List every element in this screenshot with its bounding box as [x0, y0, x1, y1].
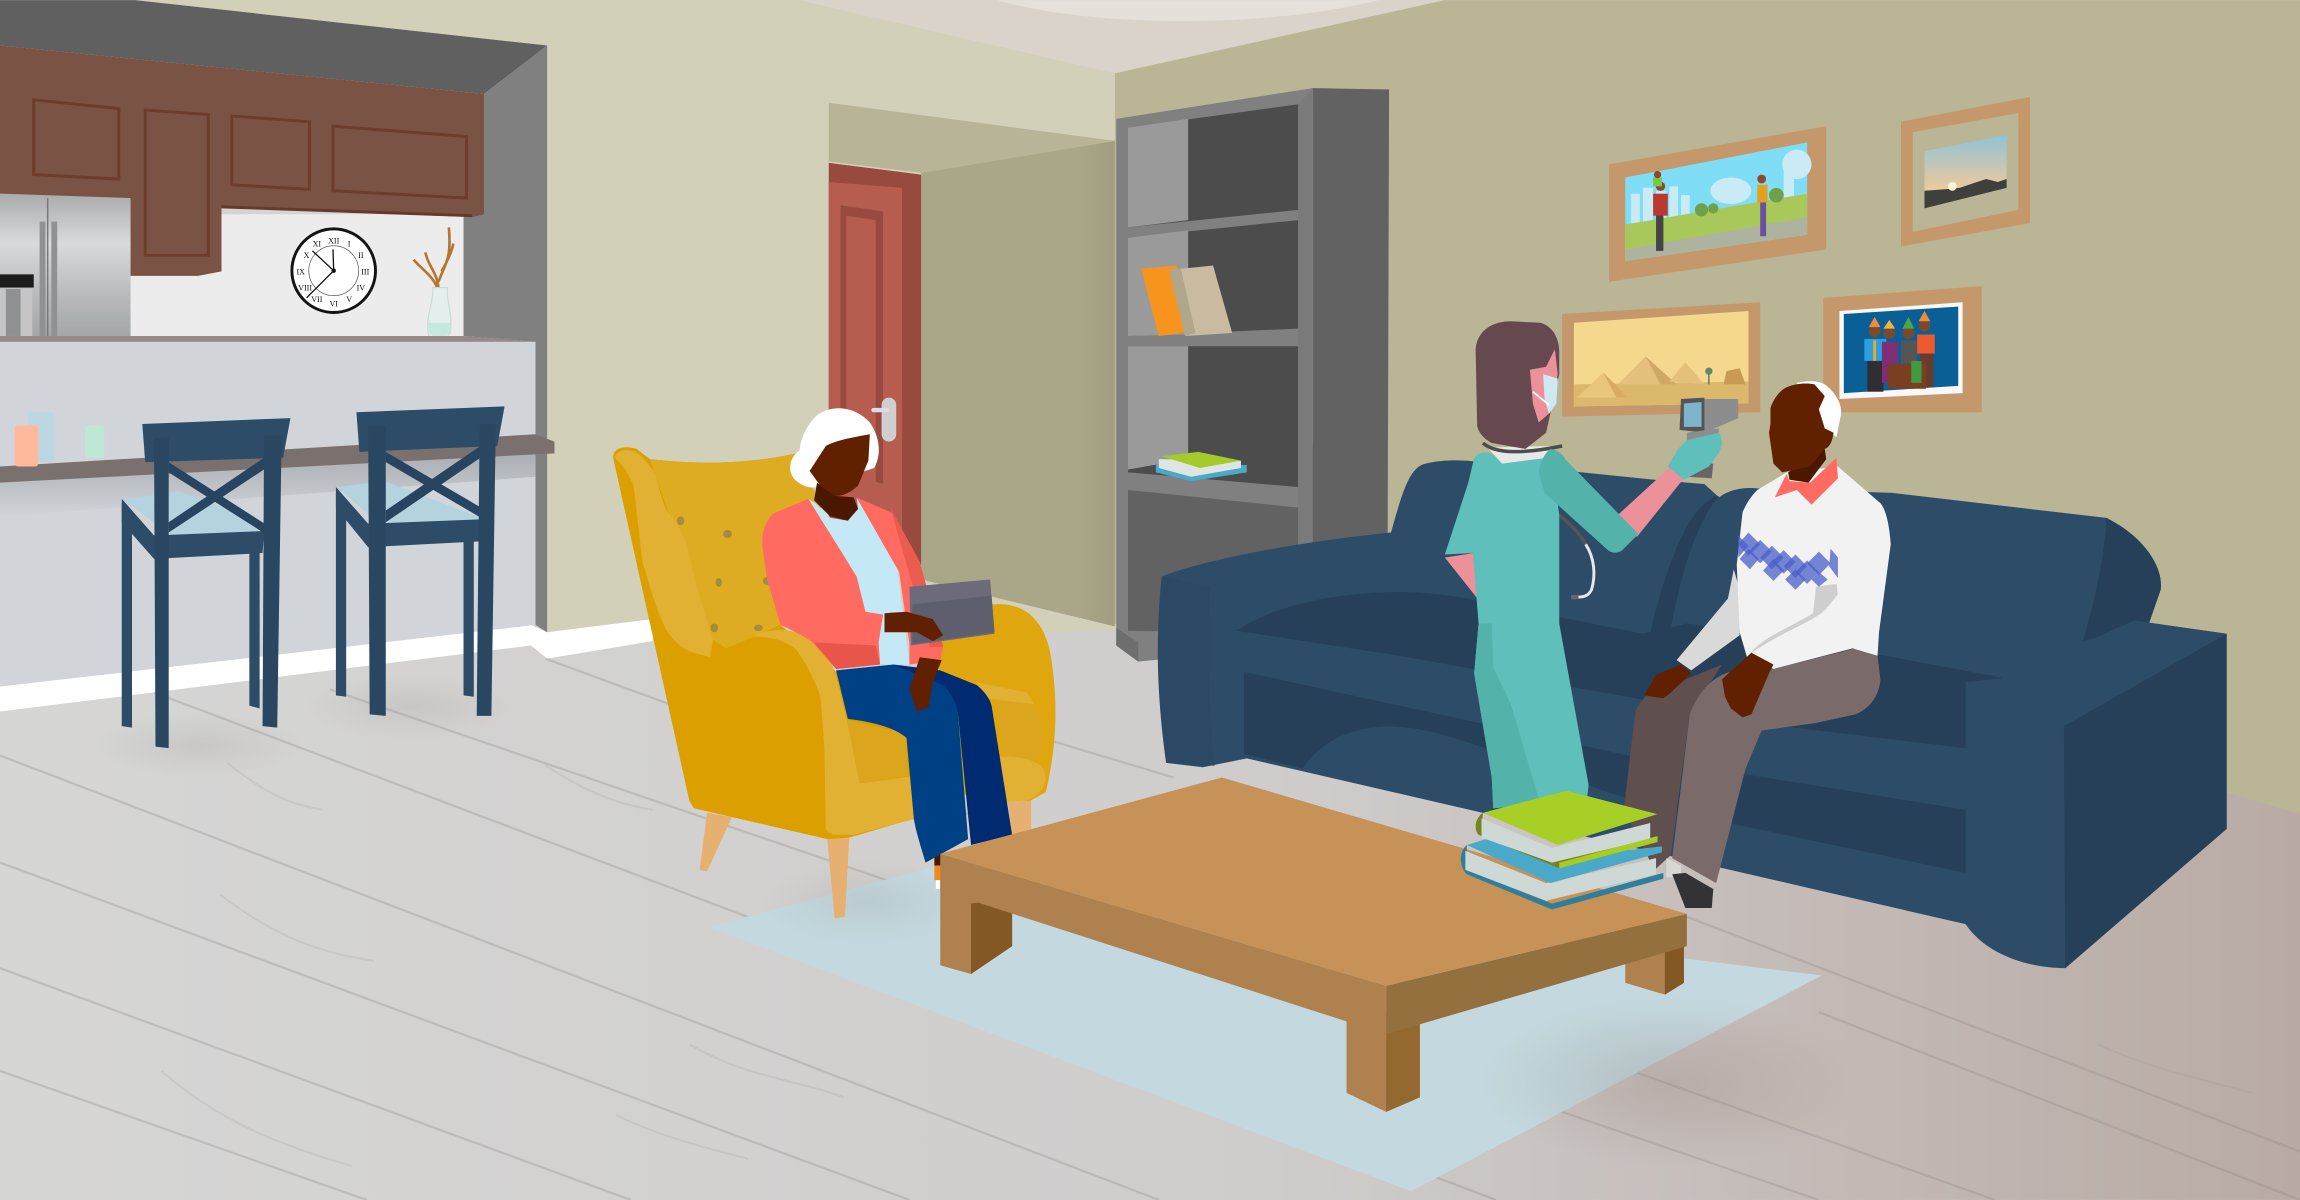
- kitchen side wall: [464, 46, 547, 632]
- man: collar: [1775, 458, 1838, 505]
- nurse: sleeve right: [1539, 449, 1638, 553]
- picture frame: family birthday: [1823, 286, 1982, 412]
- sofa: back: [1391, 460, 2161, 704]
- nurse: hair: [1476, 321, 1559, 449]
- nurse: face: [1530, 349, 1558, 423]
- clock: III: [361, 267, 370, 276]
- clock: VIII: [298, 283, 312, 292]
- books on table: [1461, 791, 1663, 910]
- woman: shirt: [808, 497, 909, 665]
- woman: hair: [790, 408, 879, 488]
- alcove wall: [653, 73, 1115, 641]
- clock: [292, 229, 376, 312]
- man: far leg: [1624, 665, 1722, 870]
- rug: [708, 865, 1822, 1191]
- sofa: base: [1162, 528, 2227, 968]
- man: hands: [1644, 653, 1773, 717]
- clock: I: [348, 239, 351, 248]
- picture frame: sunset: [1901, 97, 2030, 246]
- man: head: [1769, 383, 1834, 472]
- ceiling: [799, 0, 1445, 73]
- sofa: seat dark bands: [1237, 592, 2002, 748]
- coffee table: [940, 777, 1687, 1112]
- floor shadow: [763, 861, 1863, 1168]
- clock: II: [358, 251, 364, 260]
- woman: face: [810, 434, 870, 496]
- man: hair: [1797, 381, 1841, 437]
- woman: far leg: [893, 665, 1012, 845]
- stool 1: [122, 418, 290, 748]
- nurse: body: [1468, 449, 1589, 808]
- bookshelf: [1116, 88, 1389, 662]
- man seated: [1624, 381, 1891, 908]
- picture frame: pyramids: [1562, 302, 1760, 417]
- shelf books: stack: [1156, 452, 1247, 481]
- counter: [0, 336, 554, 687]
- clock: VI: [329, 300, 338, 309]
- woman: cardigan: [762, 499, 883, 669]
- cabinets: [0, 46, 484, 276]
- clock: IX: [296, 267, 305, 276]
- woman seated: [762, 408, 1012, 889]
- nurse: mask: [1533, 374, 1558, 414]
- nurse: collar: [1487, 446, 1550, 464]
- woman: near leg: [836, 665, 968, 863]
- nurse: pink arm behind: [1445, 553, 1479, 600]
- baseboard: [0, 619, 653, 711]
- armchair: [613, 447, 1055, 918]
- sofa: [1158, 460, 2227, 968]
- nurse: forearm: [1618, 467, 1684, 537]
- woman: tablet: [909, 579, 995, 645]
- nurse: [1445, 321, 1738, 808]
- picture frame: family in park: [1609, 126, 1826, 282]
- backsplash: [131, 214, 464, 336]
- clock: IV: [357, 283, 365, 292]
- book: upper: [1476, 791, 1658, 868]
- man: near leg: [1672, 648, 1880, 883]
- floor: [0, 587, 2300, 1200]
- nurse: stethoscope tube: [1559, 515, 1594, 597]
- kitchen ceiling: [0, 0, 547, 94]
- nurse: glove: [1668, 433, 1722, 480]
- stool 2: [336, 406, 505, 716]
- sofa: right arm front: [2064, 634, 2227, 968]
- cups: [15, 412, 104, 467]
- clock: XI: [313, 239, 321, 248]
- woman: neck: [814, 483, 858, 521]
- man: shoe: [1666, 858, 1713, 908]
- thermometer: [1680, 398, 1738, 478]
- stool shadows: [92, 675, 516, 777]
- clock: V: [346, 295, 352, 304]
- woman: shoe: [934, 843, 942, 889]
- woman: hands: [885, 612, 943, 711]
- vase with branches: [414, 227, 453, 340]
- book: lower: [1461, 839, 1663, 910]
- fridge: [0, 194, 131, 336]
- man: sweater: [1737, 467, 1891, 669]
- clock: X: [304, 251, 310, 260]
- right wall: [1115, 0, 2300, 814]
- door: [829, 163, 921, 565]
- clock: XII: [328, 237, 340, 246]
- nurse: sleeve: [1445, 458, 1474, 555]
- left wall: [135, 0, 1115, 641]
- clock: VII: [311, 295, 323, 304]
- man: argyle pattern: [1738, 533, 1838, 590]
- shelf books: upright: [1141, 266, 1232, 336]
- nurse: trouser shade: [1474, 623, 1540, 808]
- man: left arm: [1677, 569, 1740, 670]
- sofa: left arm shade: [1158, 577, 1215, 766]
- man: neck: [1788, 449, 1826, 483]
